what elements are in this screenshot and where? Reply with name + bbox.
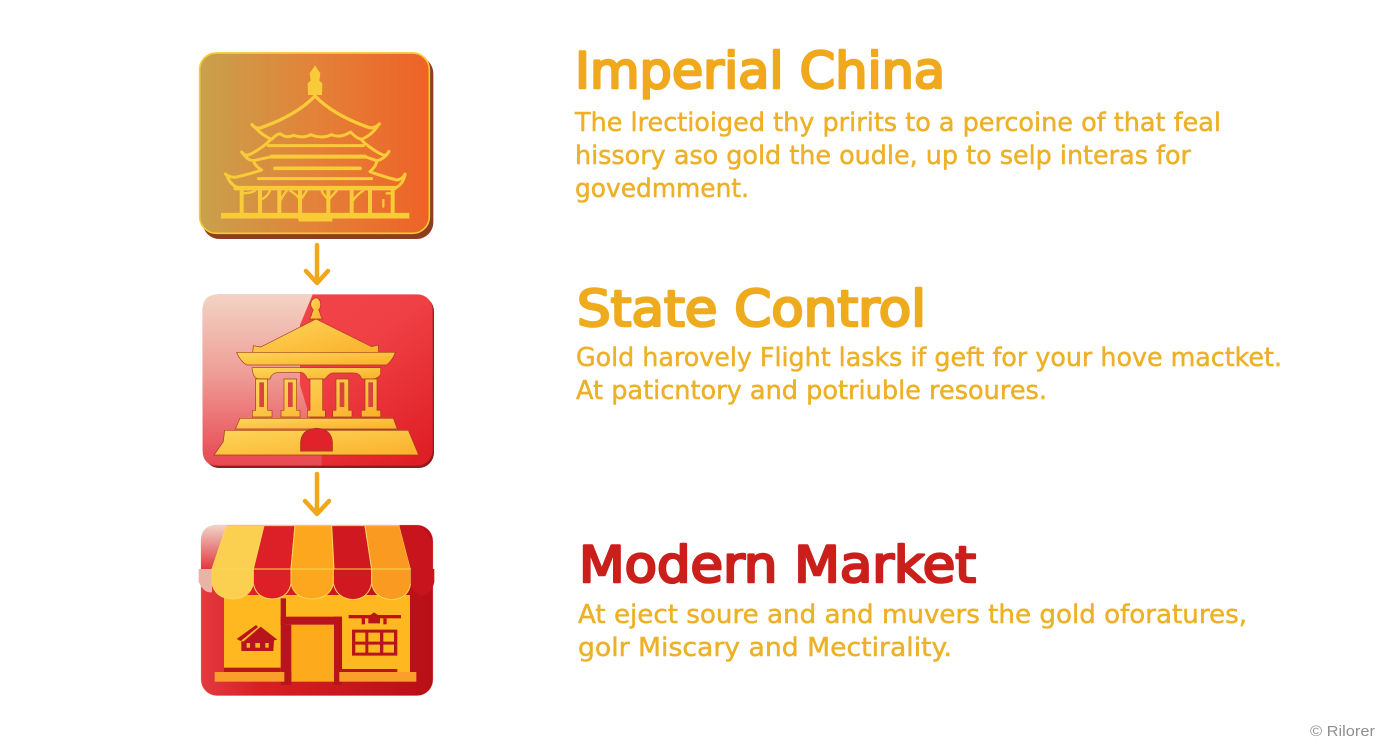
arrow: state to market <box>305 474 329 514</box>
text: Modern Market description: At eject soure and and muvers the gold oforatures, <box>578 600 1247 630</box>
watermark: © Rilorer <box>1310 723 1375 740</box>
text: State Control description: Gold harovely Flight lasks if geft for your hove mactket. <box>576 343 1282 373</box>
text: Imperial China description: hissory aso gold the oudle, up to selp interas for <box>575 141 1191 171</box>
arrow: palace to state <box>306 245 328 283</box>
icon: market shop card <box>199 525 434 696</box>
text: Imperial China description <box>574 108 1221 204</box>
icon: imperial palace card <box>200 53 433 239</box>
small house icon <box>237 625 277 651</box>
text: Modern Market description <box>578 600 1247 663</box>
shop wall <box>215 595 416 685</box>
heading: Imperial China: Imperial China <box>575 42 945 100</box>
text: State Control description: At paticntory and potriuble resoures. <box>576 376 1047 406</box>
text: State Control description <box>576 343 1282 406</box>
text: Imperial China description: govedmment. <box>575 174 749 204</box>
heading: Modern Market: Modern Market <box>579 536 976 594</box>
shop sign and window <box>349 612 401 656</box>
text: Modern Market description: golr Miscary and Mectirality. <box>578 633 952 663</box>
icon: state hall card <box>203 294 434 468</box>
heading: State Control: State Control <box>577 280 926 338</box>
text: Imperial China description: The lrectioiged thy pririts to a percoine of that feal <box>574 108 1221 138</box>
awning <box>199 526 434 600</box>
